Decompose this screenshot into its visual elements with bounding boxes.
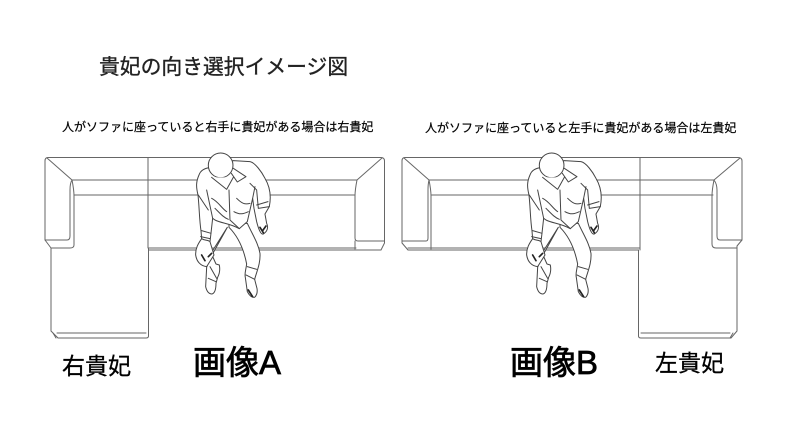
title: 貴妃の向き選択イメージ図: [99, 56, 348, 79]
person A: [196, 153, 270, 297]
caption: right chaise rule: 人がソファに座っていると右手に貴妃がある場合は右貴妃: [62, 120, 373, 134]
sofa A: right chaise: [45, 158, 384, 338]
label: image A: 画像A: [193, 344, 281, 381]
label: right chaise: 右貴妃: [62, 353, 131, 379]
label: left chaise: 左貴妃: [655, 350, 724, 376]
label: image B: 画像B: [510, 344, 598, 381]
caption: left chaise rule: 人がソファに座っていると左手に貴妃がある場合は左貴妃: [425, 121, 736, 135]
person B: [527, 153, 601, 297]
sofa B: left chaise: [402, 158, 742, 338]
